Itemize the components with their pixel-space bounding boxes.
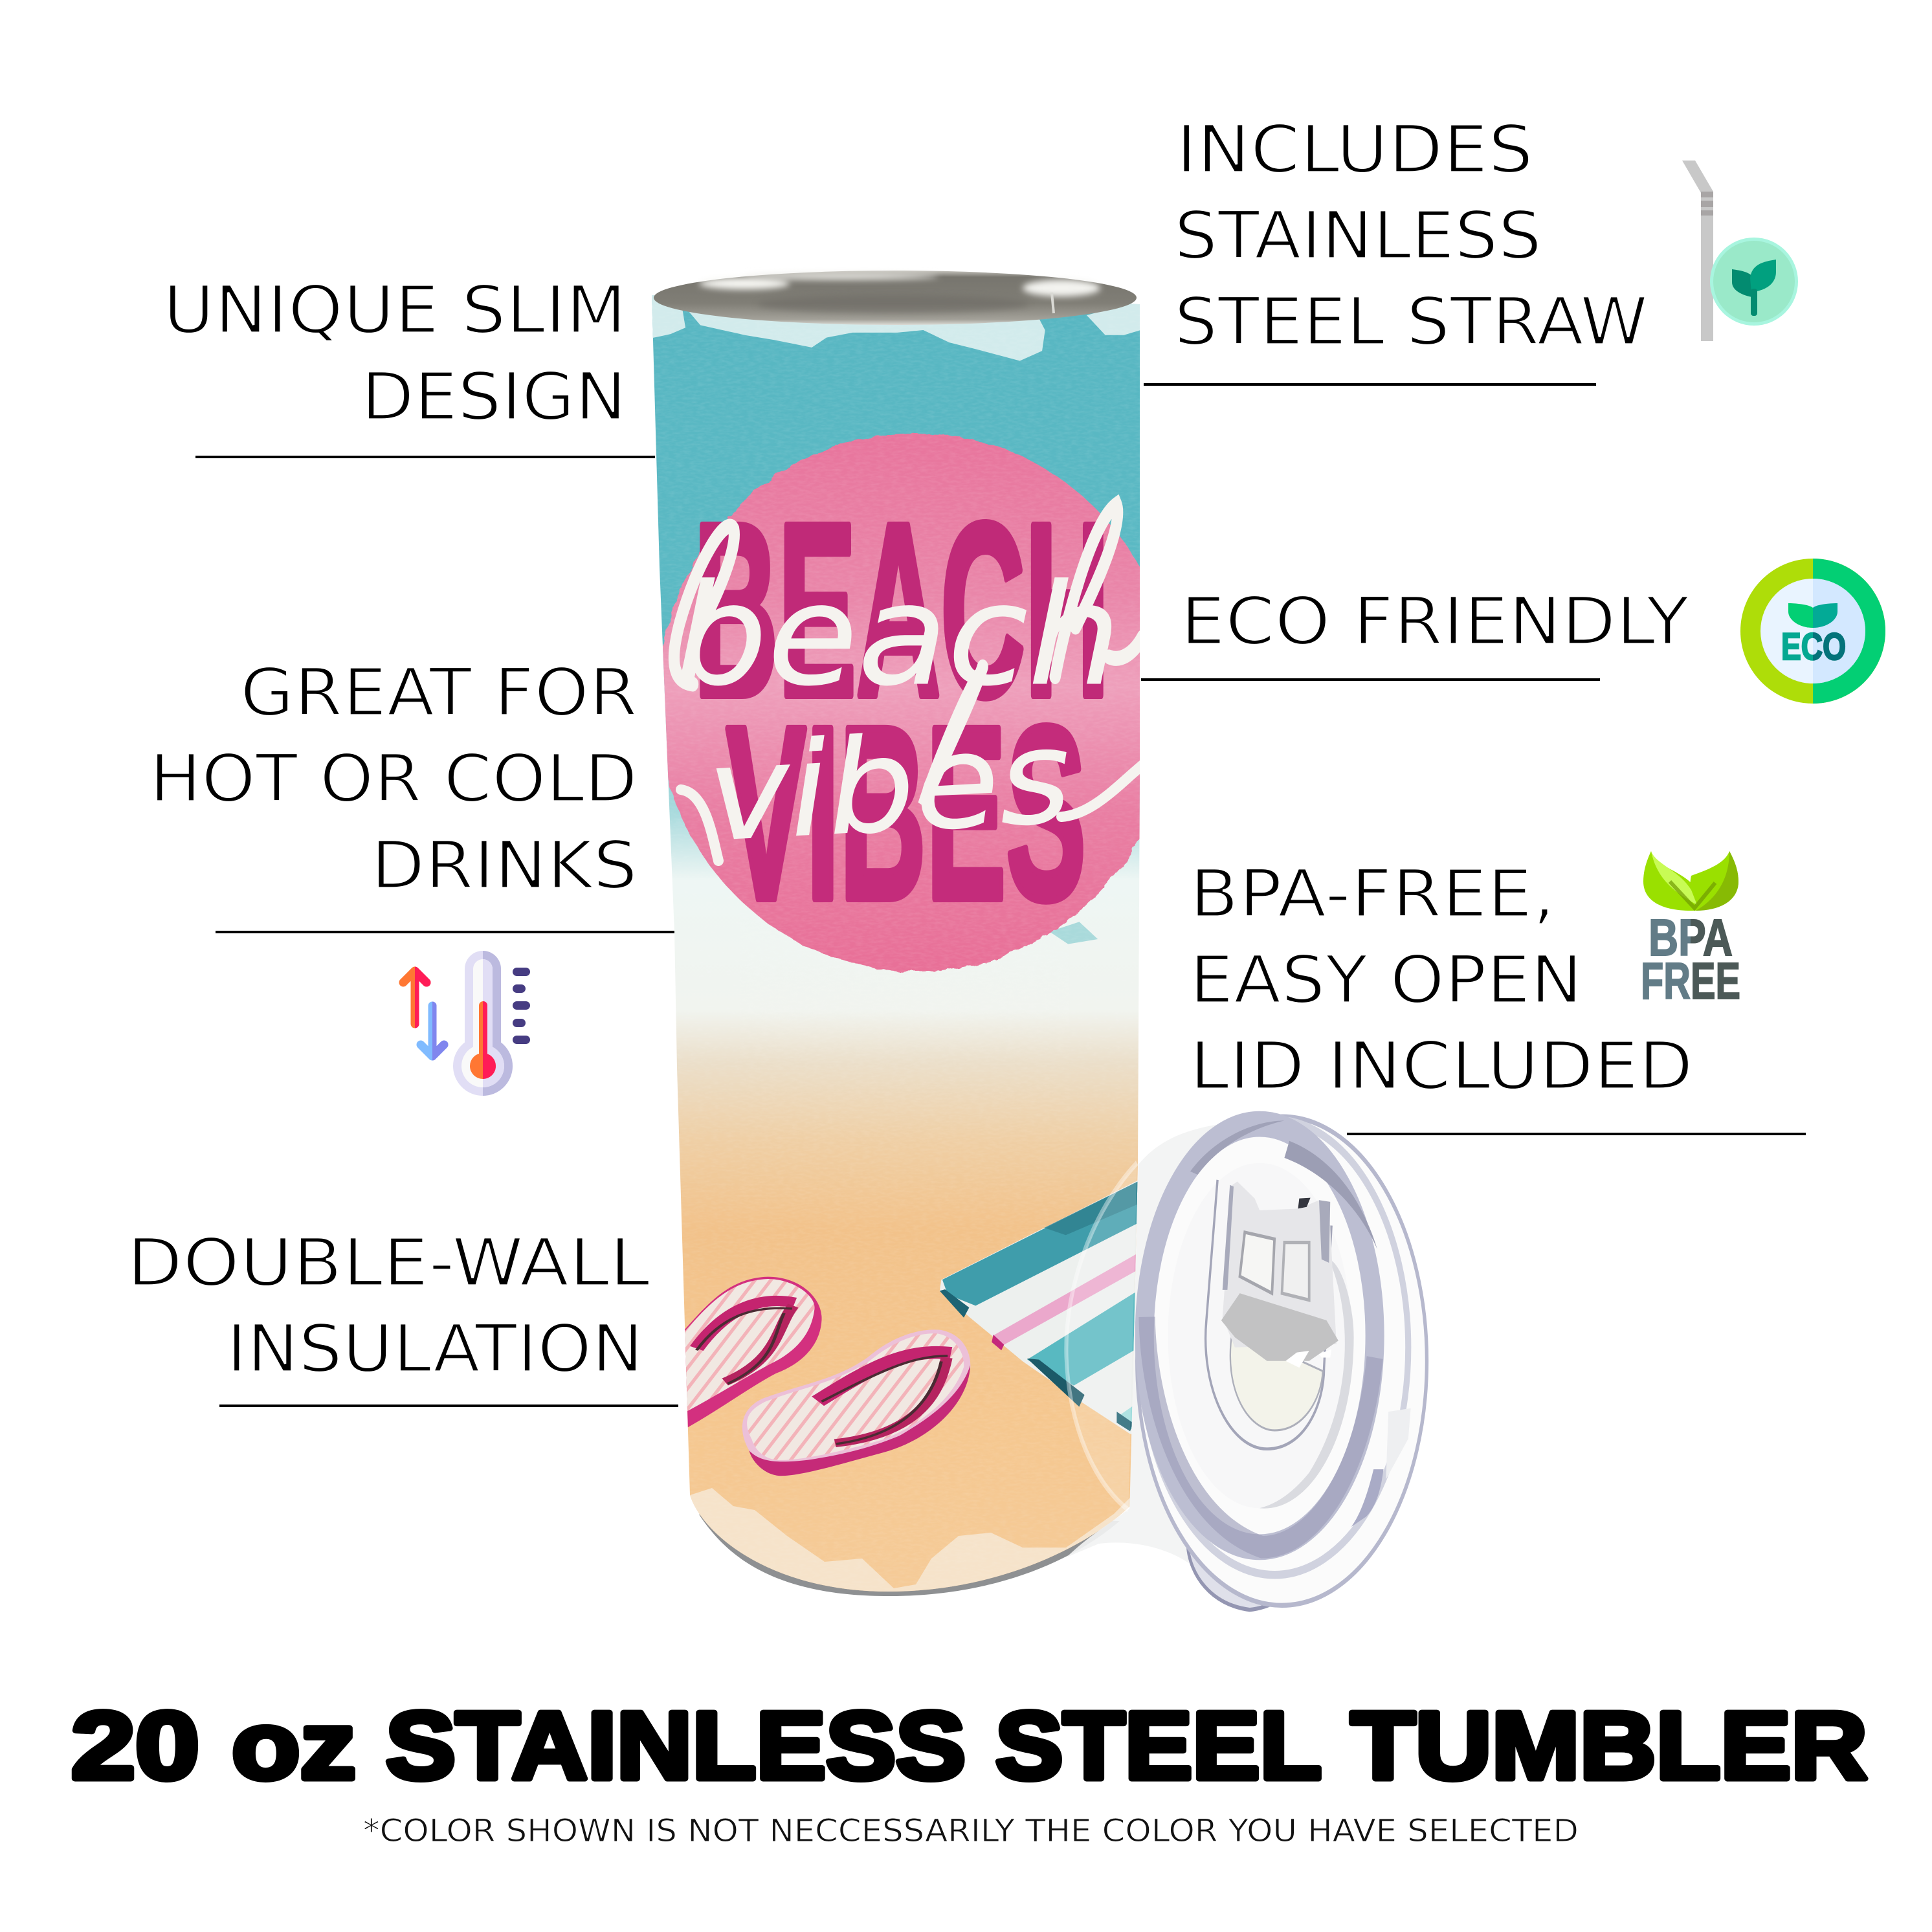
callout: double-wall insulation [127,1225,678,1407]
tumbler [647,265,1175,1605]
callout: stainless steel straw: INCLUDES [1176,111,1533,188]
callout: unique slim design [163,272,655,458]
tumbler body wrap: BEACH [694,472,1109,748]
up arrow [403,971,427,1024]
title: STAINLESS [386,1693,966,1799]
keyhole outline [1206,1180,1331,1449]
lid [1066,1116,1427,1610]
callout: bpa-free lid: BPA-FREE, [1190,856,1555,933]
callout: eco friendly: ECO FRIENDLY [1181,583,1690,660]
lid translucent skirt [1067,1124,1220,1574]
callout: hot or cold drinks: DRINKS [371,827,638,904]
lid translucent skirt over tumbler [1066,1163,1137,1510]
script flourishes: vibes [681,762,1146,861]
bpa wordmark: BPA [1649,909,1733,966]
sprout badge [1710,238,1798,326]
small teal patch [1050,922,1098,944]
callout: double-wall insulation: INSULATION [227,1311,643,1388]
callout: stainless steel straw: STEEL STRAW [1174,283,1648,361]
icon: eco badge [1740,559,1885,704]
title: TUMBLER [1351,1693,1867,1799]
callout: stainless steel straw: STAINLESS [1174,197,1542,274]
upper right ring streak [1284,1141,1377,1249]
watercolor pink circle [657,433,1175,972]
callout: eco friendly [1141,583,1690,681]
down arrow [421,1006,444,1056]
second ring [1140,1120,1408,1575]
eco wordmark: ECO [1781,626,1846,668]
free wordmark: FREE [1641,952,1740,1010]
lid floor shade [1260,1260,1354,1509]
scale ticks [513,968,530,1044]
script flourishes: beach [674,504,1142,805]
tumbler base shadow [699,1515,1120,1596]
callout: unique slim design: DESIGN [361,359,627,436]
leaves [1643,851,1738,911]
tumbler body wrap [652,295,1140,1592]
keyhole inner [1230,1331,1323,1430]
lower right highlights [1386,1408,1411,1480]
thermometer [453,951,513,1096]
callout: hot or cold drinks: GREAT FOR [240,654,638,731]
callout: double-wall insulation: DOUBLE-WALL [127,1225,650,1302]
skirt arc over towel [1066,1163,1137,1510]
title [71,1693,1867,1799]
straw [1682,161,1713,341]
callout: bpa-free lid: LID INCLUDED [1190,1028,1693,1105]
mechanism [1221,1182,1338,1368]
flip-flops [680,1277,970,1476]
main ring band [1144,1124,1375,1547]
outer ring [1137,1116,1427,1605]
main ring shadow [1147,1317,1375,1547]
beach towel [940,1177,1144,1436]
title: oz [232,1693,356,1799]
title: 20 [71,1693,199,1799]
callout: bpa-free lid [1190,856,1806,1135]
title: STEEL [995,1693,1322,1799]
right flip-flop [742,1329,970,1476]
left flip-flop [680,1277,822,1432]
steel rim [654,271,1137,325]
paper grain [647,265,1146,1599]
top watercolor clouds [650,291,1140,361]
callout: hot or cold drinks [150,654,674,933]
icon: straw with sprout [1682,161,1798,341]
script: vibes: vibes [704,702,1074,871]
tumbler body wrap: VIBES [726,675,1086,951]
bottom sand clouds [690,1488,1130,1592]
disclaimer: *COLOR SHOWN IS NOT NECCESSARILY THE COLOR YOU HAVE SELECTED [363,1813,1579,1849]
icon: thermometer with arrows [403,951,530,1096]
icon: bpa free leaves [1641,851,1740,1010]
callout: hot or cold drinks: HOT OR COLD [150,740,638,817]
lid tab [1188,1540,1324,1610]
lid inner floor [1168,1163,1351,1508]
callout: stainless steel straw [1144,111,1648,386]
script: beach: beach [674,554,1121,716]
eco leaves [1788,603,1813,628]
callout: bpa-free lid: EASY OPEN [1190,942,1582,1019]
top ring streaks [1190,1120,1284,1175]
callout: unique slim design: UNIQUE SLIM [163,272,627,349]
